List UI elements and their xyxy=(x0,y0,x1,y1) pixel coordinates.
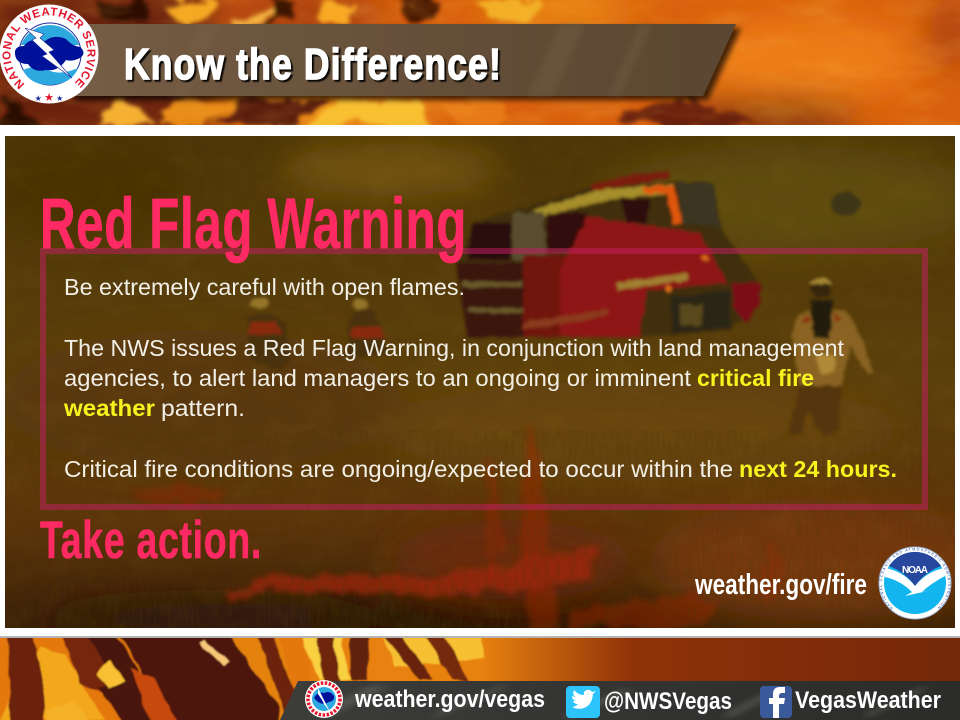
handle: @NWSVegas: @NWSVegas xyxy=(604,688,732,715)
background tones xyxy=(0,144,960,634)
line: NWS issues: The NWS issues a Red Flag Warning, in conjunction with land management xyxy=(64,335,845,361)
text block: warning description xyxy=(63,274,897,482)
bottom fire photo xyxy=(0,630,960,720)
line: agencies: agencies, to alert land managers to an ongoing or imminent xyxy=(64,365,692,391)
heading: Take action: Take action. xyxy=(40,511,262,570)
highlight: next 24 hours: next 24 hours. xyxy=(739,456,897,482)
line: critical conditions: Critical fire conditions are ongoing/expected to occur within the xyxy=(64,456,733,482)
title text: Know the Difference! xyxy=(124,40,502,89)
top fire photo xyxy=(0,0,960,125)
logo stars: ★ ★ ★ xyxy=(35,92,63,104)
highlight: weather: weather xyxy=(63,395,155,421)
firefighter right xyxy=(788,277,874,438)
title banner xyxy=(70,24,736,96)
link: weather.gov/fire: weather.gov/fire xyxy=(694,569,867,601)
banner sheen xyxy=(168,24,652,96)
highlight: critical fire: critical fire xyxy=(697,365,814,391)
warning box xyxy=(43,251,925,507)
icon: small NWS logo xyxy=(305,680,343,718)
icon: NOAA logo xyxy=(878,546,952,620)
link: weather.gov/vegas: weather.gov/vegas xyxy=(354,686,545,713)
footer bar xyxy=(280,680,960,720)
bottom shadow line xyxy=(0,636,960,638)
fire streaks xyxy=(130,420,781,630)
handle: VegasWeather: VegasWeather xyxy=(795,687,941,714)
fire truck xyxy=(457,171,861,338)
banner ribbon xyxy=(70,24,736,96)
panel: red flag warning photo xyxy=(0,136,960,634)
icon: National Weather Service logo xyxy=(0,4,98,104)
white frame xyxy=(0,125,960,637)
grass texture xyxy=(5,430,955,628)
firefighters left xyxy=(248,297,388,370)
icon: Facebook xyxy=(760,686,792,718)
heading: Red Flag Warning: Red Flag Warning xyxy=(40,185,467,264)
mottled texture xyxy=(5,136,955,628)
footer streaks xyxy=(310,686,930,718)
NOAA ring text: NATIONAL OCEANIC AND ATMOSPHERIC ADMINISTRATION xyxy=(880,548,950,610)
line: careful: Be extremely careful with open flames. xyxy=(64,274,465,300)
logo ring text: NATIONAL WEATHER SERVICE xyxy=(2,7,96,90)
line: pattern: pattern. xyxy=(161,395,245,421)
icon: Twitter xyxy=(566,686,600,718)
NOAA wordmark: NOAA xyxy=(902,565,928,576)
